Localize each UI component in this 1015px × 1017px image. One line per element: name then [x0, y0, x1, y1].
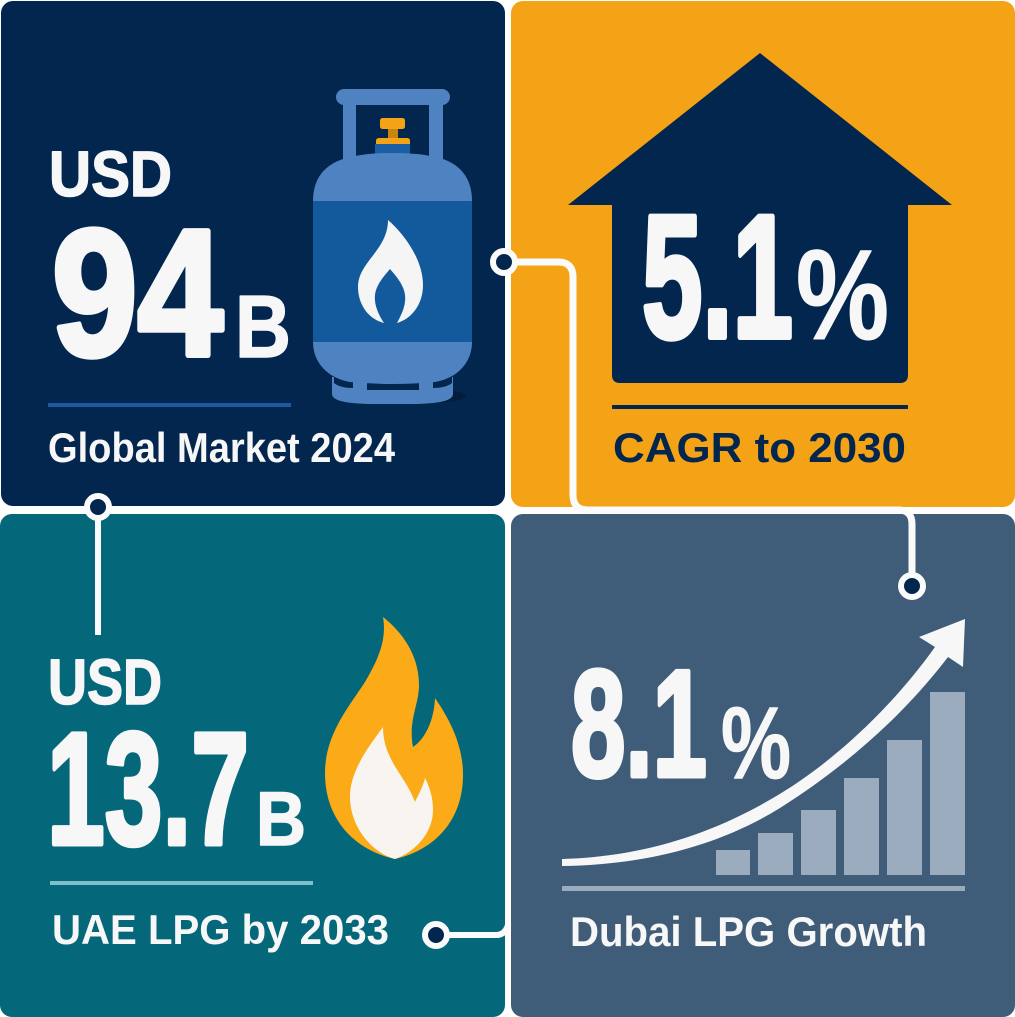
stat: 8.1%: 8.1 [571, 639, 707, 809]
arrow: growth curve [562, 619, 965, 866]
panel: global market [1, 1, 505, 506]
label: CAGR to 2030: CAGR to 2030 [613, 424, 906, 471]
panel: UAE LPG [0, 514, 505, 1017]
label: UAE LPG by 2033: UAE LPG by 2033 [52, 906, 389, 953]
panel: Dubai LPG [511, 514, 1015, 1017]
stat: 13.7B: 13.7 [47, 699, 249, 878]
stat: 13.7B: B [256, 777, 306, 862]
stat: 94B: 94 [52, 193, 223, 394]
stat: 5.1%: 5.1 [642, 180, 793, 375]
stat: 8.1%: % [721, 686, 791, 800]
label: Dubai LPG Growth: Dubai LPG Growth [570, 908, 927, 955]
heading: USD: USD [48, 646, 162, 718]
icon: fire [325, 617, 463, 859]
panel: CAGR [511, 1, 1015, 507]
bar chart [716, 692, 965, 875]
connector: UAE LPG to Dubai growth [425, 924, 508, 946]
heading: USD: USD [49, 138, 172, 210]
icon: flame on cylinder [358, 220, 423, 323]
icon: gas cylinder [313, 89, 472, 404]
label: global market 2024: Global Market 2024 [48, 424, 396, 471]
stat: 5.1%: % [796, 224, 889, 367]
stat: 94B: B [235, 277, 291, 376]
connector: global market to UAE LPG [87, 496, 109, 635]
connector: global market to Dubai growth [493, 251, 923, 597]
icon: house [568, 53, 952, 383]
